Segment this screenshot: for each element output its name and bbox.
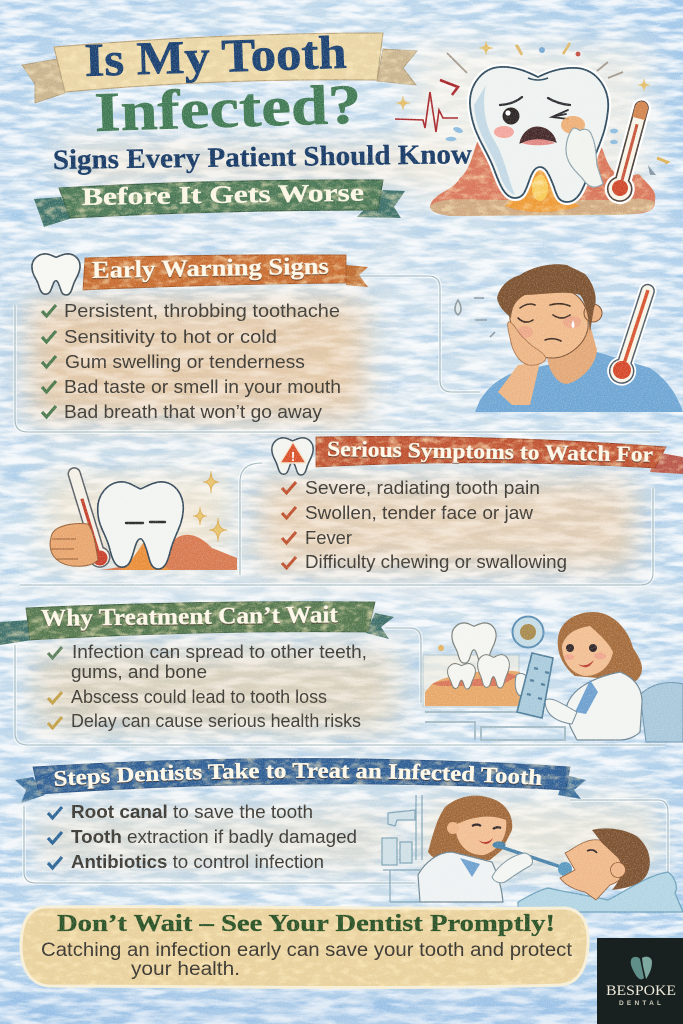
checklist: Gum swelling or tenderness [65, 351, 305, 372]
call to action body: your health. [131, 959, 240, 980]
logo wordmark: BESPOKE [606, 983, 676, 999]
checklist: Difficulty chewing or swallowing [305, 551, 567, 572]
checklist: Abscess could lead to tooth loss [71, 686, 327, 707]
heading ribbon [83, 255, 368, 290]
illustration: teeth and bacteria diagram [423, 616, 565, 740]
thermometer [605, 98, 655, 204]
title line 2: Infected? [93, 74, 362, 144]
panel outline [15, 276, 660, 432]
checklist: Sensitivity to hot or cold [64, 326, 277, 347]
header: title block [22, 27, 473, 227]
heading ribbon [0, 602, 394, 645]
checklist: gums, and bone [71, 661, 207, 682]
checklist: Delay can cause serious health risks [71, 710, 361, 731]
checklist: Infection can spread to other teeth, [72, 641, 367, 662]
pulse line [395, 92, 458, 132]
panel: serious symptoms [20, 436, 683, 585]
checklist: Bad taste or smell in your mouth [64, 376, 341, 397]
checklist: Persistent, throbbing toothache [64, 300, 340, 321]
heading text: Why Treatment Can’t Wait [41, 602, 338, 632]
logo: Bespoke Dental [597, 938, 683, 1024]
heading text: Early Warning Signs [92, 254, 329, 284]
heading text: Steps Dentists Take to Treat an Infected Tooth [54, 762, 542, 790]
checklist: Swollen, tender face or jaw [305, 502, 534, 523]
hero illustration: sore tooth [395, 41, 667, 216]
panel background [21, 907, 588, 988]
sweat drops [455, 298, 495, 337]
checklist: Antibiotics to control infection [71, 851, 324, 872]
subtitle: Signs Every Patient Should Know [53, 139, 473, 176]
call to action body: Catching an infection early can save your tooth and protect [41, 940, 573, 961]
illustration: man with toothache [475, 264, 683, 412]
illustration: dental tools [382, 795, 422, 902]
title ribbon [22, 33, 417, 103]
checklist: Fever [305, 527, 352, 548]
heading ribbon [15, 758, 586, 803]
panel: early warning signs [15, 254, 683, 432]
title line 1: Is My Tooth [84, 27, 347, 87]
illustration: dentist treating patient [418, 796, 683, 912]
subtitle ribbon text: Before It Gets Worse [82, 180, 364, 211]
call to action heading: Don’t Wait – See Your Dentist Promptly! [57, 911, 555, 937]
checklist [282, 477, 567, 572]
icon: tooth [32, 254, 80, 295]
hand on cheek [566, 128, 603, 187]
panel outline [15, 628, 665, 745]
call to action body [41, 940, 573, 980]
icon: tooth with warning sign [272, 438, 313, 475]
checklist [48, 641, 367, 731]
panel: steps dentists take [15, 758, 683, 913]
logo tagline: DENTAL [619, 1000, 661, 1007]
illustration: tooth with thermometer [50, 465, 237, 570]
logo icon [631, 957, 652, 979]
checklist: Severe, radiating tooth pain [305, 477, 540, 498]
inflamed gums [430, 140, 655, 216]
pain marks and droplets [396, 41, 667, 175]
panel outline [24, 800, 668, 883]
heading ribbon [316, 436, 683, 474]
tooth character [470, 67, 608, 202]
icon: tooth with warning sign: ! [291, 449, 295, 464]
subtitle ribbon [34, 180, 405, 227]
call to action panel [21, 907, 588, 988]
thermometer [607, 281, 661, 386]
checklist: Root canal to save the tooth [71, 801, 313, 822]
panel outline [20, 463, 653, 585]
illustration: dentist with sample [515, 612, 683, 742]
panel: why treatment can't wait [0, 602, 683, 745]
checklist [42, 300, 341, 422]
checklist: Bad breath that won’t go away [64, 401, 323, 422]
checklist [48, 801, 357, 872]
heading text: Serious Symptoms to Watch For [327, 436, 653, 467]
checklist: Tooth extraction if badly damaged [71, 826, 357, 847]
